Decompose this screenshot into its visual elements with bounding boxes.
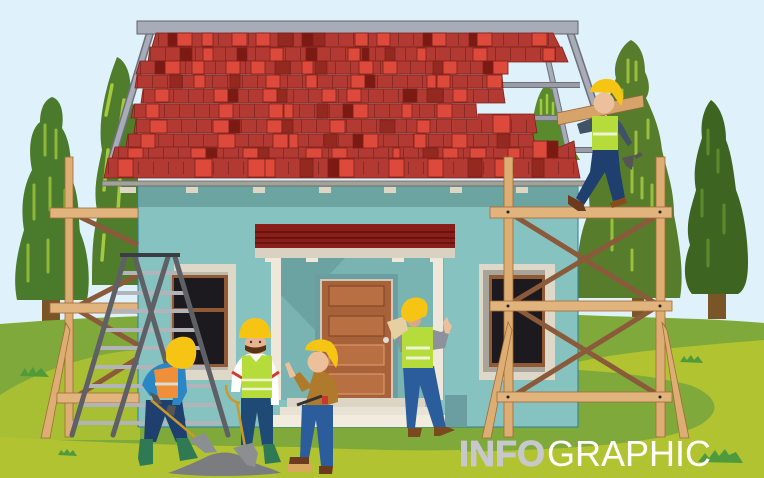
porch columns bbox=[271, 258, 443, 400]
row 6 bbox=[146, 104, 452, 118]
row 7 bbox=[150, 115, 510, 133]
door bbox=[315, 274, 398, 398]
eave corbels bbox=[120, 187, 528, 193]
grass tufts bbox=[20, 355, 743, 463]
steps bbox=[273, 398, 445, 427]
ground bbox=[0, 315, 764, 478]
roof shingles bbox=[104, 33, 580, 178]
title: INFOGRAPHIC: INFOGRAPHIC bbox=[459, 433, 711, 474]
right window bbox=[479, 264, 555, 380]
eave shadow bbox=[139, 183, 577, 207]
shingle seams bbox=[108, 39, 578, 168]
trees bbox=[15, 40, 748, 322]
row 2 bbox=[180, 48, 555, 61]
worker: bearded with shovel bbox=[226, 318, 281, 467]
stone pile bbox=[168, 453, 281, 476]
ladder bbox=[72, 253, 228, 435]
row 10 bbox=[118, 159, 544, 177]
row 3 bbox=[155, 61, 508, 74]
left scaffolding bbox=[41, 157, 139, 438]
row 4 bbox=[170, 75, 502, 88]
shingle bases bbox=[104, 33, 580, 178]
tree: tall right bbox=[577, 40, 682, 318]
row 1 bbox=[168, 33, 547, 46]
worker: shovelling orange vest bbox=[138, 337, 217, 466]
house bbox=[120, 182, 578, 427]
row 8 bbox=[141, 134, 510, 148]
posts bbox=[482, 157, 689, 438]
tree: far right bbox=[685, 100, 748, 319]
tree: far left bbox=[15, 97, 89, 322]
roof frame bbox=[102, 21, 600, 186]
row 5 bbox=[155, 89, 467, 102]
worker: carrying plank on scaffold bbox=[557, 79, 644, 211]
right scaffolding bbox=[482, 157, 689, 438]
left window bbox=[170, 264, 236, 380]
tree: small behind roof bbox=[530, 84, 580, 160]
worker: pointing with drill bbox=[285, 339, 338, 474]
wall bbox=[138, 182, 578, 427]
worker: back view holding plans bbox=[387, 298, 455, 437]
tree: behind left of house bbox=[92, 57, 138, 285]
row 9 bbox=[128, 141, 558, 158]
diagonal braces bbox=[513, 215, 660, 396]
porch roof bbox=[255, 224, 455, 262]
porch recess bbox=[272, 258, 444, 400]
beams bbox=[490, 207, 672, 402]
